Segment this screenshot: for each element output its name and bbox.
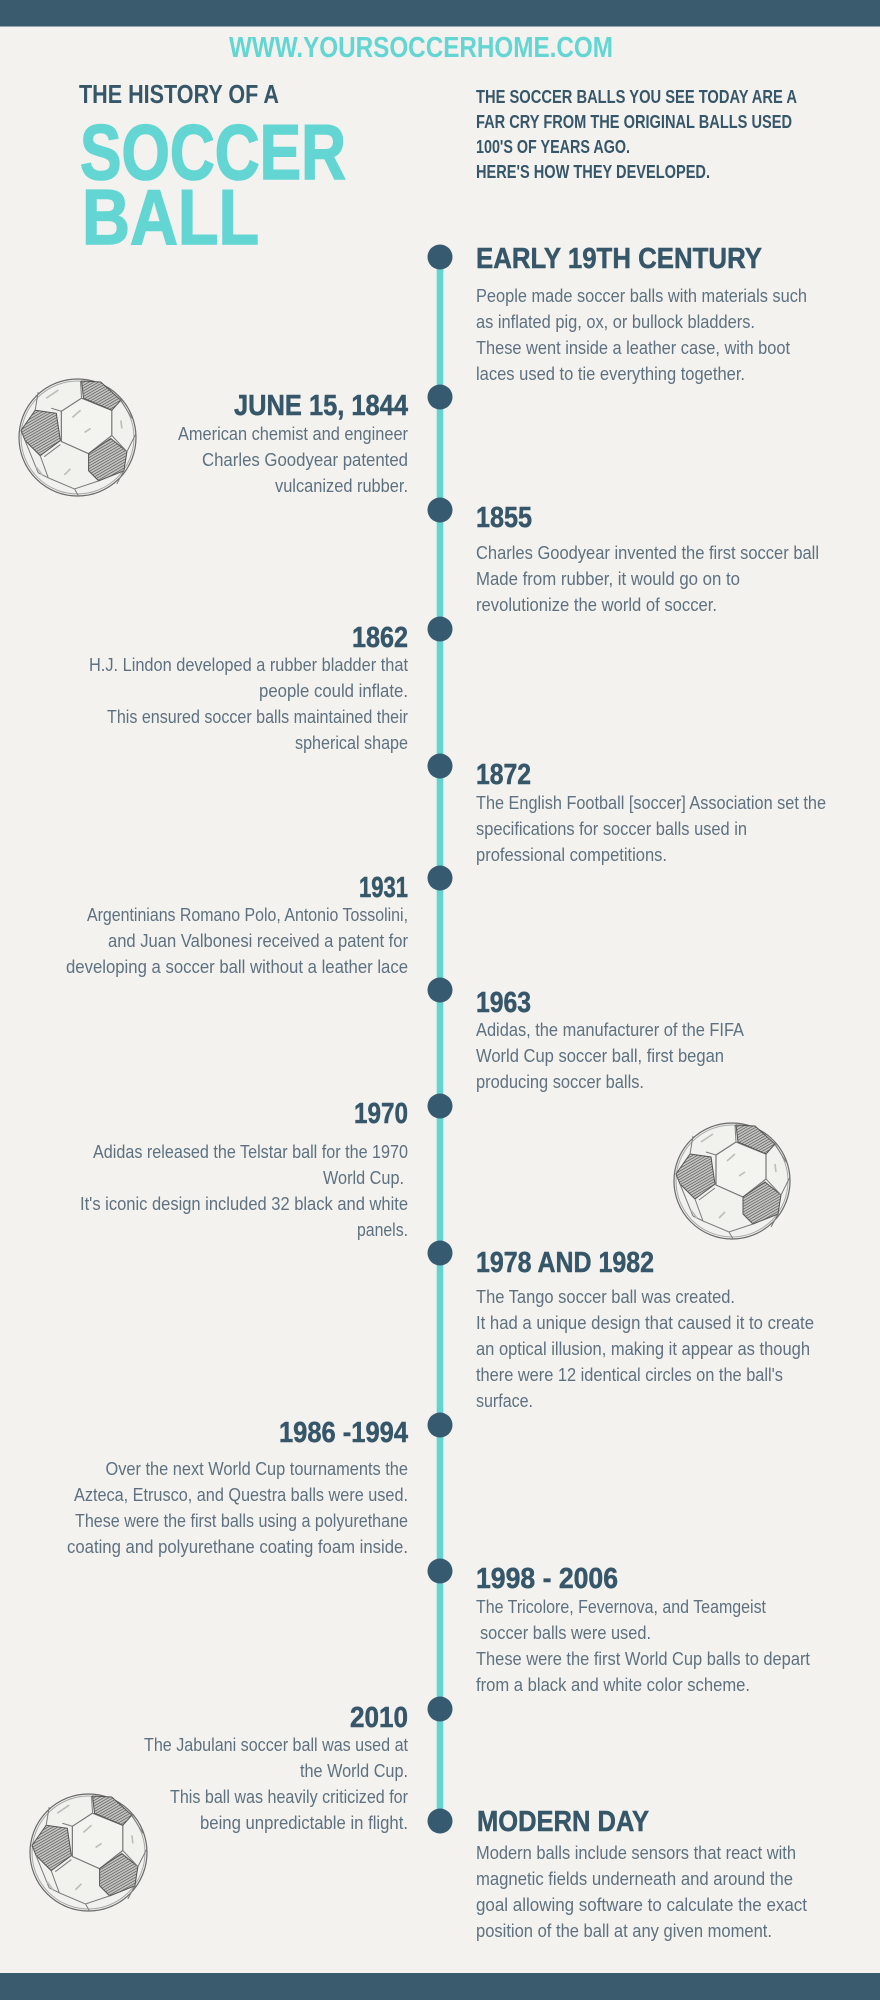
body: magnetic fields underneath and around the — [476, 1869, 793, 1889]
top bar — [0, 0, 880, 26]
body — [178, 424, 408, 496]
body: These went inside a leather case, with boot — [476, 338, 790, 358]
icon: soccer ball left bottom — [30, 1794, 147, 1911]
body: revolutionize the world of soccer. — [476, 595, 717, 615]
timeline dots — [428, 244, 452, 1834]
intro text: THE SOCCER BALLS YOU SEE TODAY ARE A — [476, 87, 797, 107]
body: producing soccer balls. — [476, 1072, 644, 1092]
event: modern day — [476, 1806, 807, 1941]
intro text: 100'S OF YEARS AGO. — [476, 137, 630, 157]
event: 1998-2006 — [476, 1563, 810, 1695]
body: Over the next World Cup tournaments the — [106, 1459, 408, 1479]
title word soccer: SOCCER — [80, 108, 346, 196]
body: People made soccer balls with materials such — [476, 286, 807, 306]
body: coating and polyurethane coating foam inside. — [67, 1537, 408, 1557]
event: early 19th century — [476, 243, 807, 384]
body: as inflated pig, ox, or bullock bladders. — [476, 312, 755, 332]
event: 1931 — [66, 872, 408, 977]
title — [79, 79, 346, 261]
body — [476, 543, 819, 615]
body: position of the ball at any given moment. — [476, 1921, 772, 1941]
body — [476, 1287, 814, 1411]
body: It's iconic design included 32 black and white — [80, 1194, 408, 1214]
intro text: HERE'S HOW THEY DEVELOPED. — [476, 162, 710, 182]
body: spherical shape — [295, 733, 408, 753]
body: Charles Goodyear invented the first soccer ball — [476, 543, 819, 563]
title kicker: THE HISTORY OF A — [79, 79, 279, 109]
heading: 1855 — [476, 502, 532, 534]
heading: 1963 — [476, 987, 531, 1019]
event: 1986-1994 — [67, 1417, 408, 1557]
timeline spine — [437, 257, 443, 1821]
body: Adidas, the manufacturer of the FIFA — [476, 1020, 744, 1040]
body: developing a soccer ball without a leather lace — [66, 957, 408, 977]
body: Argentinians Romano Polo, Antonio Tossolini, — [87, 905, 408, 925]
body — [80, 1142, 408, 1240]
body: an optical illusion, making it appear as though — [476, 1339, 810, 1359]
heading: 1978 AND 1982 — [476, 1247, 654, 1279]
body: It had a unique design that caused it to create — [476, 1313, 814, 1333]
heading: 1862 — [352, 622, 408, 654]
heading: JUNE 15, 1844 — [234, 390, 408, 422]
heading: 1986 -1994 — [279, 1417, 408, 1449]
body — [89, 655, 408, 753]
event: 1978 and 1982 — [476, 1247, 814, 1411]
body — [67, 1459, 408, 1557]
body — [476, 1020, 744, 1092]
heading: MODERN DAY — [477, 1806, 649, 1838]
body: The Jabulani soccer ball was used at — [144, 1735, 408, 1755]
body: The English Football [soccer] Association set the — [476, 793, 826, 813]
body: Made from rubber, it would go on to — [476, 569, 740, 589]
body: American chemist and engineer — [178, 424, 408, 444]
body: Modern balls include sensors that react with — [476, 1843, 796, 1863]
website url: WWW.YOURSOCCERHOME.COM — [229, 32, 613, 64]
body: specifications for soccer balls used in — [476, 819, 747, 839]
heading: 1931 — [359, 872, 408, 904]
body: laces used to tie everything together. — [476, 364, 745, 384]
body — [144, 1735, 408, 1833]
heading: 1872 — [476, 759, 531, 791]
body: there were 12 identical circles on the ball's — [476, 1365, 783, 1385]
body — [476, 1597, 810, 1695]
body: The Tango soccer ball was created. — [476, 1287, 735, 1307]
body: Azteca, Etrusco, and Questra balls were used. — [74, 1485, 408, 1505]
body: soccer balls were used. — [480, 1623, 651, 1643]
event: 2010 — [144, 1702, 408, 1833]
heading: EARLY 19TH CENTURY — [476, 243, 762, 275]
body: These were the first balls using a polyurethane — [75, 1511, 408, 1531]
icon: soccer ball left top — [19, 379, 136, 496]
bottom bar — [0, 1973, 880, 2000]
icon: soccer ball right — [674, 1123, 790, 1239]
event: 1855 — [476, 502, 819, 615]
body: This ensured soccer balls maintained their — [107, 707, 408, 727]
heading: 1970 — [354, 1098, 408, 1130]
body: goal allowing software to calculate the exact — [476, 1895, 807, 1915]
body: Adidas released the Telstar ball for the 1970 — [93, 1142, 408, 1162]
intro text — [476, 87, 797, 182]
body: This ball was heavily criticized for — [170, 1787, 408, 1807]
body: World Cup. — [323, 1168, 404, 1188]
body: H.J. Lindon developed a rubber bladder that — [89, 655, 408, 675]
body: These were the first World Cup balls to depart — [476, 1649, 810, 1669]
title word ball: BALL — [82, 173, 259, 261]
body: vulcanized rubber. — [275, 476, 408, 496]
event: 1963 — [476, 987, 744, 1092]
event: 1872 — [476, 759, 826, 865]
event: 1970 — [80, 1098, 408, 1240]
body: the World Cup. — [300, 1761, 408, 1781]
body: professional competitions. — [476, 845, 667, 865]
body: panels. — [357, 1220, 408, 1240]
event: june 15, 1844 — [178, 390, 408, 496]
timeline — [428, 244, 452, 1834]
body: World Cup soccer ball, first began — [476, 1046, 724, 1066]
body — [66, 905, 408, 977]
body — [476, 1843, 807, 1941]
intro text: FAR CRY FROM THE ORIGINAL BALLS USED — [476, 112, 792, 132]
body — [476, 793, 826, 865]
body — [476, 286, 807, 384]
event: 1862 — [89, 622, 408, 753]
body: people could inflate. — [259, 681, 408, 701]
body: The Tricolore, Fevernova, and Teamgeist — [476, 1597, 766, 1617]
body: and Juan Valbonesi received a patent for — [108, 931, 408, 951]
body: from a black and white color scheme. — [476, 1675, 750, 1695]
body: Charles Goodyear patented — [202, 450, 408, 470]
body: being unpredictable in flight. — [200, 1813, 408, 1833]
heading: 2010 — [350, 1702, 408, 1734]
body: surface. — [476, 1391, 533, 1411]
heading: 1998 - 2006 — [476, 1563, 618, 1595]
